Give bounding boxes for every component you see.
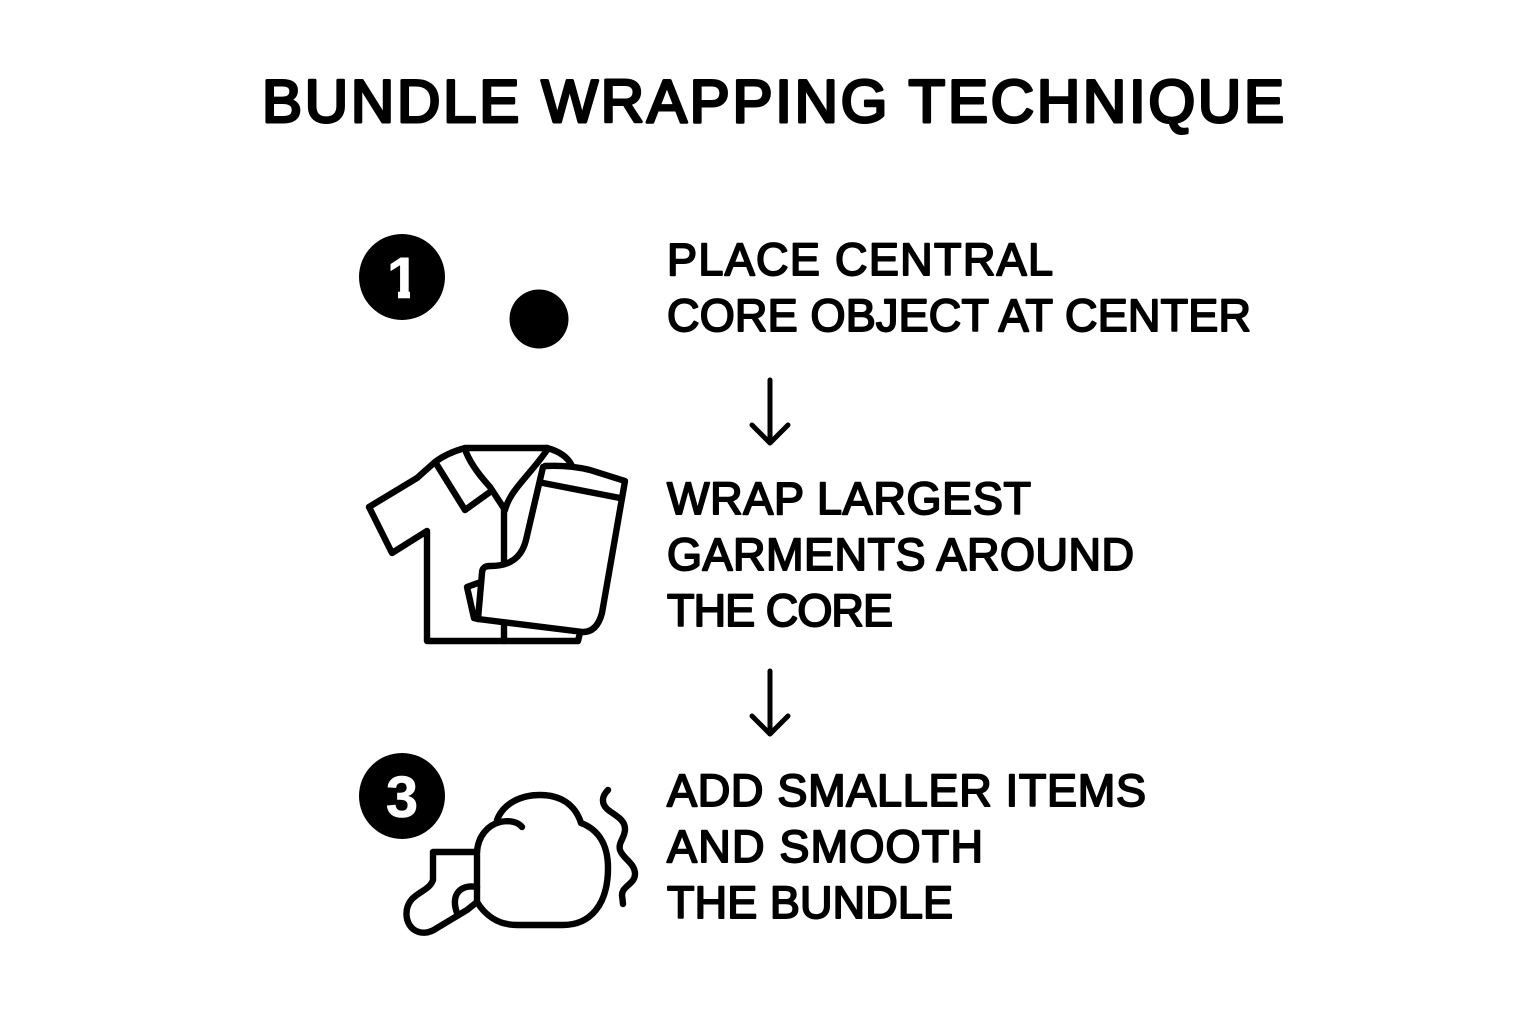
step 1 text: CORE OBJECT AT CENTER [667,290,1251,341]
step 2 text [667,473,1134,636]
step 3 text [667,765,1146,928]
step 2 text: WRAP LARGEST [667,473,1031,524]
title: BUNDLE WRAPPING TECHNIQUE [262,68,1284,135]
step 1 number badge [359,234,445,320]
step 1 [359,234,1251,348]
step 3 text: ADD SMALLER ITEMS [667,765,1146,816]
step 1 text [667,234,1251,341]
arrow: step 2 to step 3 [752,671,788,734]
icon: central core object [510,290,568,348]
step 2 [369,448,1134,641]
step 3 text: THE BUNDLE [667,877,953,928]
icon: smoothed bundle with sock [406,790,635,933]
step 3 number badge: 3 [386,765,418,830]
step 2 text: GARMENTS AROUND [667,529,1134,580]
step 1 number badge: 1 [387,246,419,311]
step 2 text: THE CORE [667,585,893,636]
arrow: step 1 to step 2 [752,380,788,443]
step 3 number badge [359,753,445,839]
step 3 text: AND SMOOTH [667,821,983,872]
step 1 text: PLACE CENTRAL [667,234,1053,285]
step 3 [359,753,1146,933]
icon: shirt and trousers [369,448,625,641]
